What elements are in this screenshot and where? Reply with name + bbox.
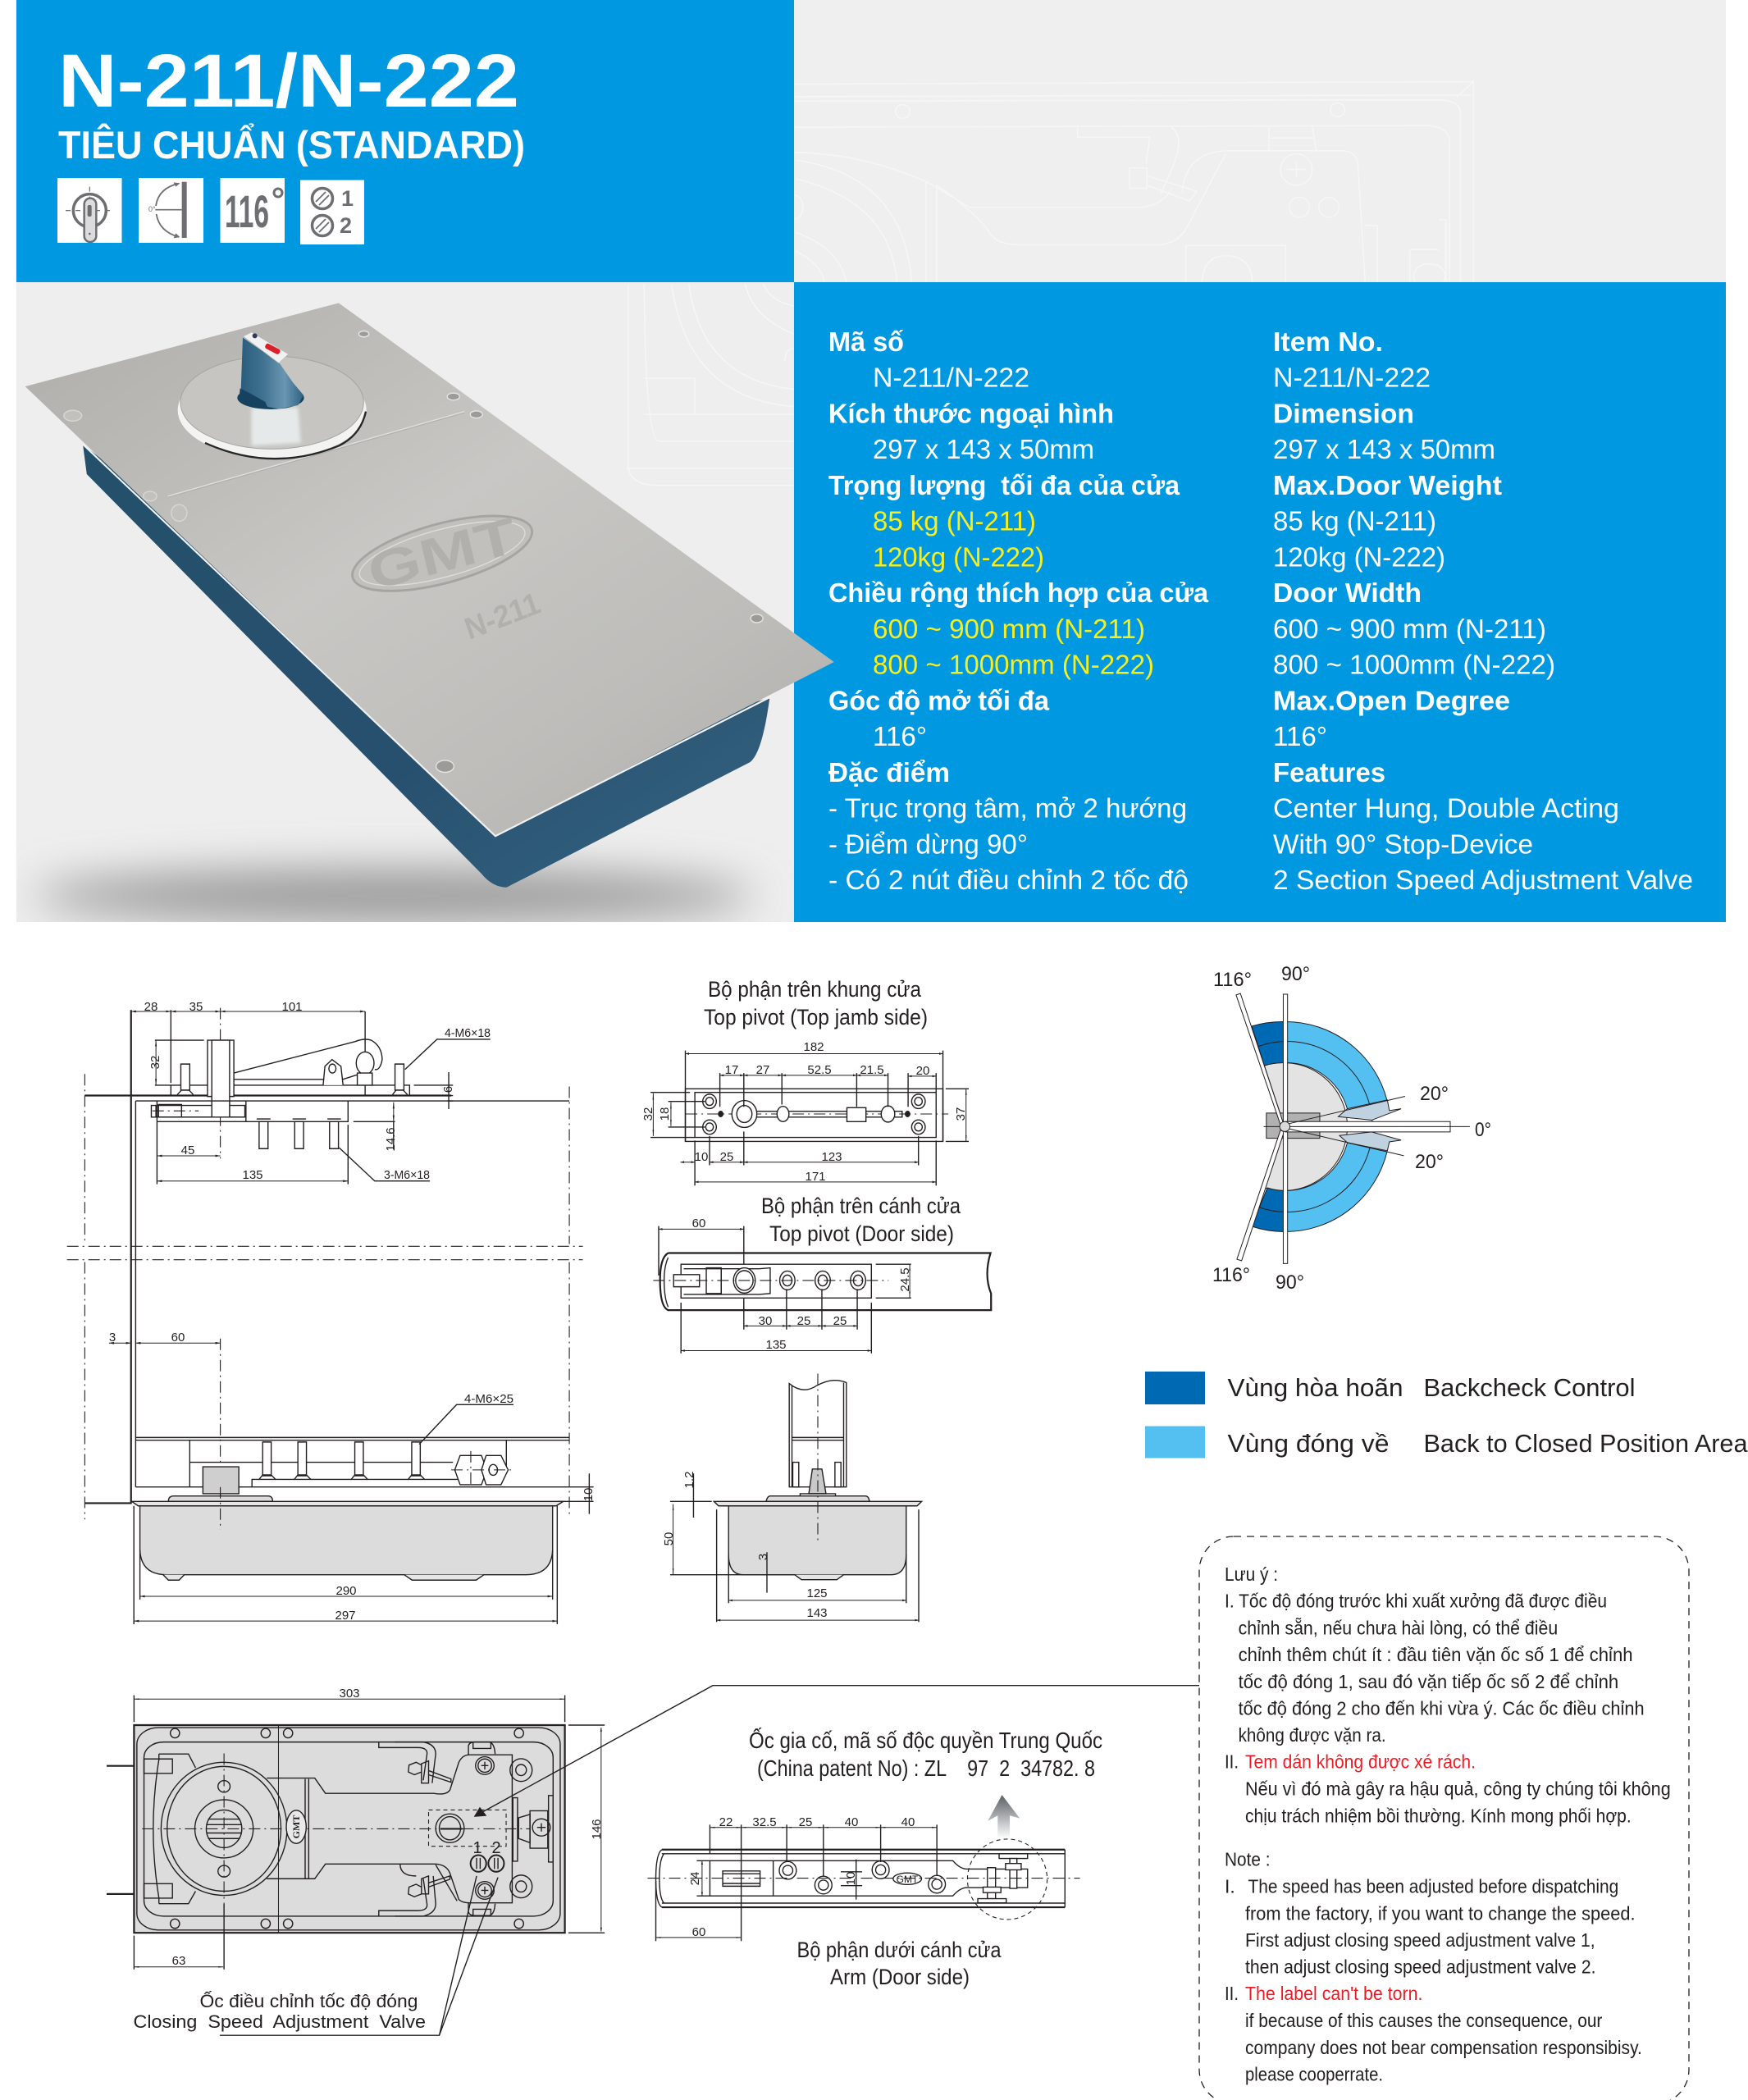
header banner xyxy=(16,0,794,282)
technical drawing: bottom view of floor spring: 303 xyxy=(339,1687,360,1701)
technical drawing: top pivot on top jamb side: 182 xyxy=(803,1040,824,1054)
technical drawing: section through floor spring: 50 xyxy=(662,1532,676,1545)
technical drawing: arm on door side: 40 xyxy=(845,1815,858,1829)
English specification column: Features xyxy=(1273,757,1385,788)
technical drawing: section through floor spring: 1.2 xyxy=(682,1472,696,1488)
English specification column: 85 kg (N-211) xyxy=(1273,505,1436,536)
technical drawing: arm on door side: 32.5 xyxy=(752,1815,777,1829)
technical drawing: top pivot on door side: 25 xyxy=(797,1314,810,1328)
technical drawing: bottom view of floor spring: 63 xyxy=(172,1954,185,1968)
English specification column: Item No. xyxy=(1273,326,1383,357)
note: English: I. xyxy=(1225,1875,1235,1897)
note: Vietnamese: chỉnh thêm chút ít : đầu tiên vặn ốc số 1 để chỉnh xyxy=(1239,1644,1633,1665)
technical drawing: bottom view of floor spring: GMT xyxy=(290,1815,302,1838)
cover plate xyxy=(25,303,834,836)
note: English: First adjust closing speed adjustment valve 1, xyxy=(1245,1929,1595,1951)
patent caption: (China patent No) : ZL 97 2 34782. 8 xyxy=(757,1755,1095,1781)
Vietnamese specification column: 85 kg (N-211) xyxy=(873,505,1036,536)
note: English: II. xyxy=(1225,1983,1239,2004)
chart: door opening angles: 0° xyxy=(1475,1119,1491,1141)
legend item: backcheck xyxy=(1145,1372,1636,1404)
technical drawing: top pivot on door side: 30 xyxy=(759,1314,772,1328)
technical drawing: bottom view of floor spring: 2 xyxy=(491,1839,501,1857)
English specification column: 600 ~ 900 mm (N-211) xyxy=(1273,614,1546,644)
note: Vietnamese: Nếu vì đó mà gây ra hậu quả, công ty chúng tôi không xyxy=(1245,1778,1671,1800)
technical drawing: installation elevation: 135 xyxy=(242,1168,263,1182)
Vietnamese specification column: 800 ~ 1000mm (N-222) xyxy=(873,650,1154,679)
legend xyxy=(1145,1372,1748,1459)
Vietnamese specification column: Kích thước ngoại hình xyxy=(828,399,1114,428)
chart: door opening angles: 116° xyxy=(1213,969,1252,991)
technical drawing: installation elevation: 35 xyxy=(189,1000,203,1014)
subtitle: TIÊU CHUẨN (STANDARD) xyxy=(58,123,525,167)
note: English: The speed has been adjusted before dispatching xyxy=(1248,1875,1618,1897)
chart: door opening angles: 116° xyxy=(1212,1264,1250,1286)
ground shadow under product xyxy=(33,870,755,922)
technical drawing: arm on door side: 24 xyxy=(688,1872,702,1885)
technical drawing: section through floor spring: 3 xyxy=(756,1554,770,1560)
embossed logo xyxy=(346,500,545,646)
callout: closing speed valves: Closing Speed Adjustment Valve xyxy=(133,2011,426,2032)
icon: double acting swing: 0° xyxy=(148,205,156,213)
technical drawing: installation elevation: 32 xyxy=(148,1056,162,1069)
Vietnamese specification column: N-211/N-222 xyxy=(873,363,1029,392)
technical drawing: installation elevation: 4-M6×18 xyxy=(445,1026,491,1040)
technical drawing: top pivot on top jamb side xyxy=(641,977,969,1185)
heading: top jamb: Bộ phận trên khung cửa xyxy=(708,977,922,1002)
chart: door opening angles: 20° xyxy=(1420,1083,1449,1105)
technical drawing: top pivot on door side: 60 xyxy=(692,1217,705,1230)
note: Vietnamese: tốc độ đóng 1, sau đó vặn tiếp ốc số 2 để chỉnh xyxy=(1239,1671,1618,1692)
English specification column: Door Width xyxy=(1273,578,1422,608)
technical drawing: arm on door side: 60 xyxy=(692,1925,705,1939)
Vietnamese specification column: Chiều rộng thích hợp của cửa xyxy=(828,578,1209,608)
technical drawing: section through floor spring: 125 xyxy=(806,1586,828,1600)
English specification column: With 90° Stop-Device xyxy=(1273,829,1533,860)
legend item: closed position: Vùng đóng về xyxy=(1227,1429,1390,1458)
note: Vietnamese: không được vặn ra. xyxy=(1239,1724,1386,1746)
patent caption xyxy=(749,1727,1102,1781)
technical drawing: installation elevation: 297 xyxy=(335,1609,356,1623)
chart: door opening angles xyxy=(1212,963,1491,1294)
English specification column xyxy=(1273,326,1693,895)
note box xyxy=(1199,1536,1689,2100)
chart: door opening angles: 90° xyxy=(1281,963,1310,985)
English specification column: 120kg (N-222) xyxy=(1273,541,1445,573)
note: English: Note : xyxy=(1225,1849,1270,1870)
heading: top jamb: Top pivot (Top jamb side) xyxy=(704,1005,928,1029)
note: English: then adjust closing speed adjustment valve 2. xyxy=(1245,1956,1596,1978)
English specification column: 800 ~ 1000mm (N-222) xyxy=(1273,650,1555,679)
icon: two speed valves: 1 xyxy=(341,186,354,211)
Vietnamese specification column: Mã số xyxy=(828,326,904,357)
icon: 116 degree xyxy=(220,178,285,243)
Vietnamese specification column: 116° xyxy=(873,721,927,751)
Vietnamese specification column: 600 ~ 900 mm (N-211) xyxy=(873,614,1145,644)
technical drawing: installation elevation: 45 xyxy=(181,1144,194,1157)
technical drawing: arm on door side: GMT xyxy=(897,1874,919,1885)
technical drawing: top pivot on door side: 24.5 xyxy=(898,1267,912,1292)
technical drawing: bottom view of floor spring: 1 xyxy=(472,1839,482,1857)
English specification column: Max.Open Degree xyxy=(1273,686,1510,715)
heading: door side: Bộ phận trên cánh cửa xyxy=(761,1194,961,1218)
technical drawing: top pivot on top jamb side: 32 xyxy=(641,1107,655,1121)
note: English: please cooperrate. xyxy=(1245,2063,1383,2084)
caption: arm door side: Arm (Door side) xyxy=(830,1965,970,1989)
caption: arm door side: Bộ phận dưới cánh cửa xyxy=(797,1938,1002,1962)
legend item: backcheck: Backcheck Control xyxy=(1424,1373,1636,1402)
title: N-211/N-222 xyxy=(58,39,519,123)
Vietnamese specification column: - Điểm dừng 90° xyxy=(828,829,1028,860)
note: Vietnamese: Lưu ý : xyxy=(1225,1564,1278,1585)
technical drawing: installation elevation xyxy=(67,1000,596,1624)
technical drawing: top pivot on door side: 135 xyxy=(765,1338,787,1352)
technical drawing: top pivot on top jamb side: 25 xyxy=(720,1150,733,1164)
technical drawing: arm on door side xyxy=(648,1727,1102,1989)
technical drawing: top pivot on top jamb side: 21.5 xyxy=(860,1063,884,1077)
technical drawing: installation elevation: 60 xyxy=(171,1331,185,1344)
speed zones xyxy=(1252,1021,1387,1232)
icon: double acting swing xyxy=(139,178,203,243)
technical drawing: installation elevation: 3-M6×18 xyxy=(384,1168,430,1182)
technical drawing: bottom view of floor spring: 146 xyxy=(590,1819,604,1840)
Vietnamese specification column: - Có 2 nút điều chỉnh 2 tốc độ xyxy=(828,865,1189,895)
note: English: from the factory, if you want to change the speed. xyxy=(1245,1902,1636,1924)
Vietnamese specification column xyxy=(828,326,1209,895)
technical drawing: top pivot on top jamb side: 20 xyxy=(916,1064,929,1078)
English specification column: 116° xyxy=(1273,721,1327,751)
technical drawing: section through floor spring xyxy=(662,1373,922,1622)
Vietnamese specification column: Đặc điểm xyxy=(828,757,950,788)
Vietnamese specification column: - Trục trọng tâm, mở 2 hướng xyxy=(828,792,1187,824)
heading: door side: Top pivot (Door side) xyxy=(769,1221,954,1246)
callout: closing speed valves: Ốc điều chỉnh tốc độ đóng xyxy=(200,1990,418,2011)
technical drawing: arm on door side: 25 xyxy=(799,1815,812,1829)
technical drawing: installation elevation: 14.6 xyxy=(384,1127,398,1152)
note: English: The label can't be torn. xyxy=(1245,1983,1422,2004)
technical drawing: installation elevation: 4-M6×25 xyxy=(464,1392,513,1406)
icon: center hung handle xyxy=(57,178,121,243)
technical drawing: top pivot on top jamb side: 123 xyxy=(821,1150,842,1164)
note: Vietnamese: II. xyxy=(1225,1751,1239,1773)
Vietnamese specification column: 297 x 143 x 50mm xyxy=(873,434,1094,464)
chart: door opening angles: 20° xyxy=(1415,1151,1444,1173)
English specification column: 2 Section Speed Adjustment Valve xyxy=(1273,865,1693,895)
English specification column: Dimension xyxy=(1273,399,1414,428)
Vietnamese specification column: Trọng lượng tối đa của cửa xyxy=(828,470,1180,500)
note: Vietnamese xyxy=(1225,1564,1671,1826)
note: Vietnamese: Tem dán không được xé rách. xyxy=(1245,1751,1476,1773)
legend item: closed position xyxy=(1145,1426,1748,1459)
chart: door opening angles: 90° xyxy=(1276,1271,1304,1294)
technical drawing: installation elevation: 101 xyxy=(281,1000,303,1014)
technical drawing: top pivot on door side: 25 xyxy=(833,1314,847,1328)
leader line from valve to note xyxy=(475,1686,1199,1816)
note: Vietnamese: chịu trách nhiệm bồi thường. Kính mong phối hợp. xyxy=(1245,1805,1632,1826)
technical drawing: top pivot on top jamb side: 52.5 xyxy=(807,1063,832,1077)
technical drawing: bottom view of floor spring xyxy=(107,1687,605,2035)
legend item: backcheck: Vùng hòa hoãn xyxy=(1227,1373,1403,1402)
icon: two speed valves: 2 xyxy=(340,213,352,238)
technical drawing: top pivot on top jamb side: 17 xyxy=(725,1063,738,1077)
technical drawing: section through floor spring: 143 xyxy=(806,1606,828,1620)
technical drawing: installation elevation: 6 xyxy=(441,1086,455,1093)
spring body xyxy=(25,303,834,888)
callout: closing speed valves xyxy=(133,1990,426,2032)
embossed logo: GMT xyxy=(363,506,522,601)
English specification column: N-211/N-222 xyxy=(1273,363,1431,392)
note: Vietnamese: I. Tốc độ đóng trước khi xuất xưởng đã được điều xyxy=(1225,1591,1607,1612)
product photo: floor spring xyxy=(25,303,834,888)
technical drawing: installation elevation: 3 xyxy=(109,1331,116,1344)
technical drawing: arm on door side: 10 xyxy=(844,1872,858,1885)
technical drawing: top pivot on top jamb side: 18 xyxy=(658,1107,672,1121)
technical drawing: installation elevation: 290 xyxy=(335,1584,357,1598)
patent caption: Ốc gia cố, mã số độc quyền Trung Quốc xyxy=(749,1727,1102,1753)
Vietnamese specification column: Góc độ mở tối đa xyxy=(828,686,1050,715)
panel: specifications xyxy=(794,282,1726,922)
icon: two speed valves xyxy=(300,180,364,244)
legend item: closed position: Back to Closed Position Area xyxy=(1424,1429,1748,1458)
note: English xyxy=(1225,1849,1642,2084)
note: Vietnamese: tốc độ đóng 2 cho đến khi vừa ý. Các ốc điều chỉnh xyxy=(1239,1697,1645,1719)
technical drawing: installation elevation: 28 xyxy=(144,1000,157,1014)
technical drawing: installation elevation: 10 xyxy=(582,1488,596,1501)
heading: door side xyxy=(761,1194,961,1246)
note: English: if because of this causes the consequence, our xyxy=(1245,2010,1603,2031)
technical drawing: top pivot on top jamb side: 37 xyxy=(954,1107,968,1121)
technical drawing: top pivot on door side xyxy=(653,1194,991,1354)
technical drawing: top pivot on top jamb side: 171 xyxy=(805,1170,826,1184)
technical drawing: arm on door side: 40 xyxy=(901,1815,915,1829)
arrow: up to patent note xyxy=(988,1795,1020,1838)
technical drawing: top pivot on top jamb side: 10 xyxy=(695,1150,708,1164)
icon: 116 degree: 116 xyxy=(225,185,269,237)
technical drawing: top pivot on top jamb side: 27 xyxy=(756,1063,769,1077)
Vietnamese specification column: 120kg (N-222) xyxy=(873,541,1044,573)
pivot disc and knob xyxy=(178,332,367,459)
English specification column: Center Hung, Double Acting xyxy=(1273,792,1619,824)
note: Vietnamese: chỉnh sẵn, nếu chưa hài lòng, có thể điều xyxy=(1239,1617,1558,1639)
technical drawing: arm on door side: 22 xyxy=(719,1815,733,1829)
panel: grey backdrop with faint drawing xyxy=(16,0,1726,922)
English specification column: Max.Door Weight xyxy=(1273,470,1502,500)
heading: top jamb xyxy=(704,977,928,1029)
English specification column: 297 x 143 x 50mm xyxy=(1273,434,1495,464)
caption: arm door side xyxy=(797,1938,1002,1989)
embossed logo: N-211 xyxy=(460,586,545,646)
note: English: company does not bear compensation responsibisy. xyxy=(1245,2037,1642,2058)
